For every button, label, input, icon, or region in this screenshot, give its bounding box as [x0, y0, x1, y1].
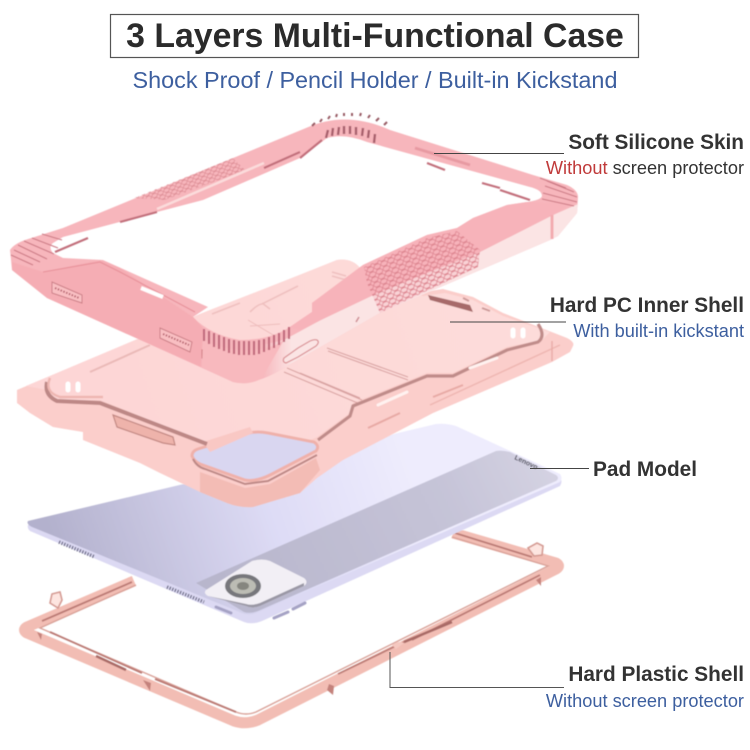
label: soft silicone skin: Without screen protector: [546, 158, 744, 178]
left wall: [12, 260, 203, 367]
label: hard pc inner shell: With built-in kickstant: [573, 321, 744, 341]
label: hard pc inner shell: [450, 294, 744, 341]
oval rings on pale wall: [283, 340, 318, 363]
metallic band: [196, 451, 558, 613]
hard plastic shell: [24, 533, 558, 723]
title box: 3 Layers Multi-Functional Case: [126, 17, 624, 55]
label: pad model: Pad Model: [593, 458, 697, 481]
inner highlight: [157, 163, 264, 209]
logo: Lenovo: [513, 454, 539, 471]
hard pc inner shell: [17, 260, 573, 507]
tablet: pad model: [28, 424, 562, 623]
camera cut-out: [192, 432, 318, 480]
dark slot and marks upper right: [428, 295, 473, 312]
camera surround lower wall: [200, 458, 320, 507]
left rear ridge: [90, 345, 150, 372]
camera module: [205, 560, 306, 608]
silhouette: [17, 260, 573, 507]
recess ridges: [43, 262, 195, 312]
back hump ribs: [312, 113, 387, 126]
side button slot: [141, 288, 163, 297]
label: hard plastic shell: Hard Plastic Shell: [568, 663, 744, 686]
clips on the frame: [50, 543, 543, 608]
speaker grilles and buttons: [59, 542, 204, 602]
dark slots: [55, 140, 530, 252]
lower slots: [368, 385, 463, 428]
camera ring shadow: [193, 455, 317, 484]
frame body: [10, 119, 578, 383]
corner ribs: [204, 327, 289, 355]
white slots on arm: [378, 358, 497, 405]
label: hard plastic shell: [390, 652, 744, 711]
small dash: [356, 317, 359, 322]
right lower ridge: [430, 345, 560, 405]
honeycomb grip back: [134, 158, 245, 200]
subtitle: Shock Proof / Pencil Holder / Built-in Kickstand: [133, 67, 617, 93]
corner hole pairs: [68, 330, 523, 390]
camera slider tab: [203, 427, 253, 452]
hinge arm left: [46, 382, 207, 444]
oval button: [202, 350, 219, 365]
honeycomb grip front: [364, 231, 480, 313]
port marks on front wall: [52, 282, 192, 352]
details visible through frame opening: [212, 272, 346, 314]
left corner ribs: [11, 234, 62, 265]
label: soft silicone skin: Soft Silicone Skin: [568, 131, 744, 154]
hinge arm right: [318, 324, 542, 440]
right corner ribs: [540, 178, 577, 206]
label: soft silicone skin: [434, 131, 744, 178]
grip left: [113, 415, 175, 445]
main face: [26, 260, 550, 445]
pale side wall: [250, 204, 578, 381]
front right top surface: [290, 200, 578, 330]
right-end divider: [550, 215, 554, 239]
label: hard plastic shell: Without screen protector: [546, 691, 744, 711]
stand recess lines: [284, 348, 408, 404]
corner front lower wall: [202, 340, 284, 383]
soft silicone skin: [10, 113, 578, 383]
label: hard pc inner shell: Hard PC Inner Shell: [550, 294, 744, 317]
